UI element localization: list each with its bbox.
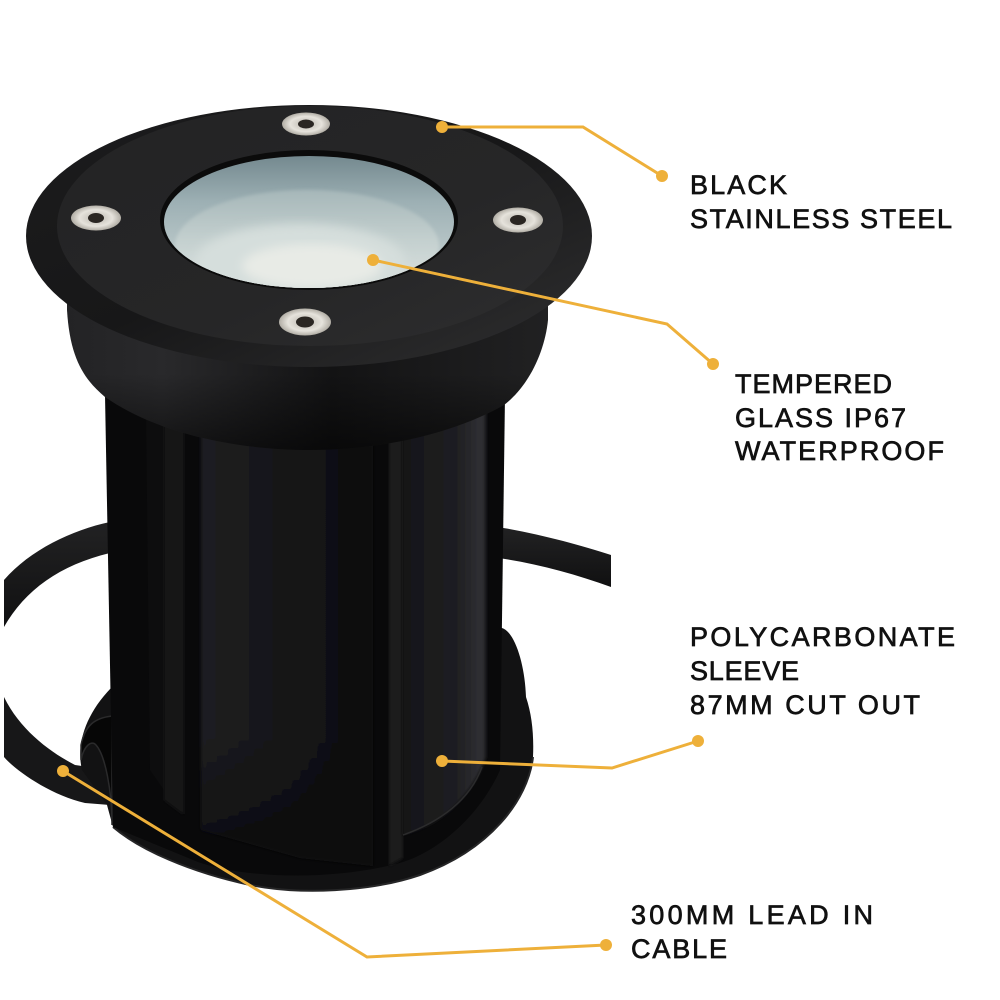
collar — [67, 280, 548, 450]
callout: black stainless steel — [436, 121, 952, 234]
callout: polycarbonate sleeve: POLYCARBONATE — [690, 622, 955, 652]
callout: tempered glass: TEMPERED — [735, 369, 892, 399]
callout: lead in cable: CABLE — [631, 934, 727, 964]
cable notch — [81, 716, 112, 825]
lens — [160, 150, 458, 302]
callout: tempered glass — [367, 254, 944, 466]
top ring — [26, 105, 592, 367]
sleeve body — [105, 395, 505, 876]
right panel — [403, 412, 486, 835]
callout: black stainless steel: STAINLESS STEEL — [690, 204, 952, 234]
callout: lead in cable — [57, 765, 873, 964]
callout: tempered glass: GLASS IP67 — [735, 403, 906, 433]
callout: tempered glass: WATERPROOF — [735, 436, 944, 466]
main panel — [201, 435, 373, 866]
icon: screws — [71, 112, 543, 336]
cable — [4, 522, 611, 805]
callout: lead in cable: 300MM LEAD IN — [631, 900, 873, 930]
base flange — [80, 628, 533, 891]
callout: polycarbonate sleeve: 87MM CUT OUT — [690, 690, 920, 720]
callout: polycarbonate sleeve — [436, 622, 955, 768]
callout: black stainless steel: BLACK — [690, 170, 787, 200]
callout: polycarbonate sleeve: SLEEVE — [690, 656, 799, 686]
